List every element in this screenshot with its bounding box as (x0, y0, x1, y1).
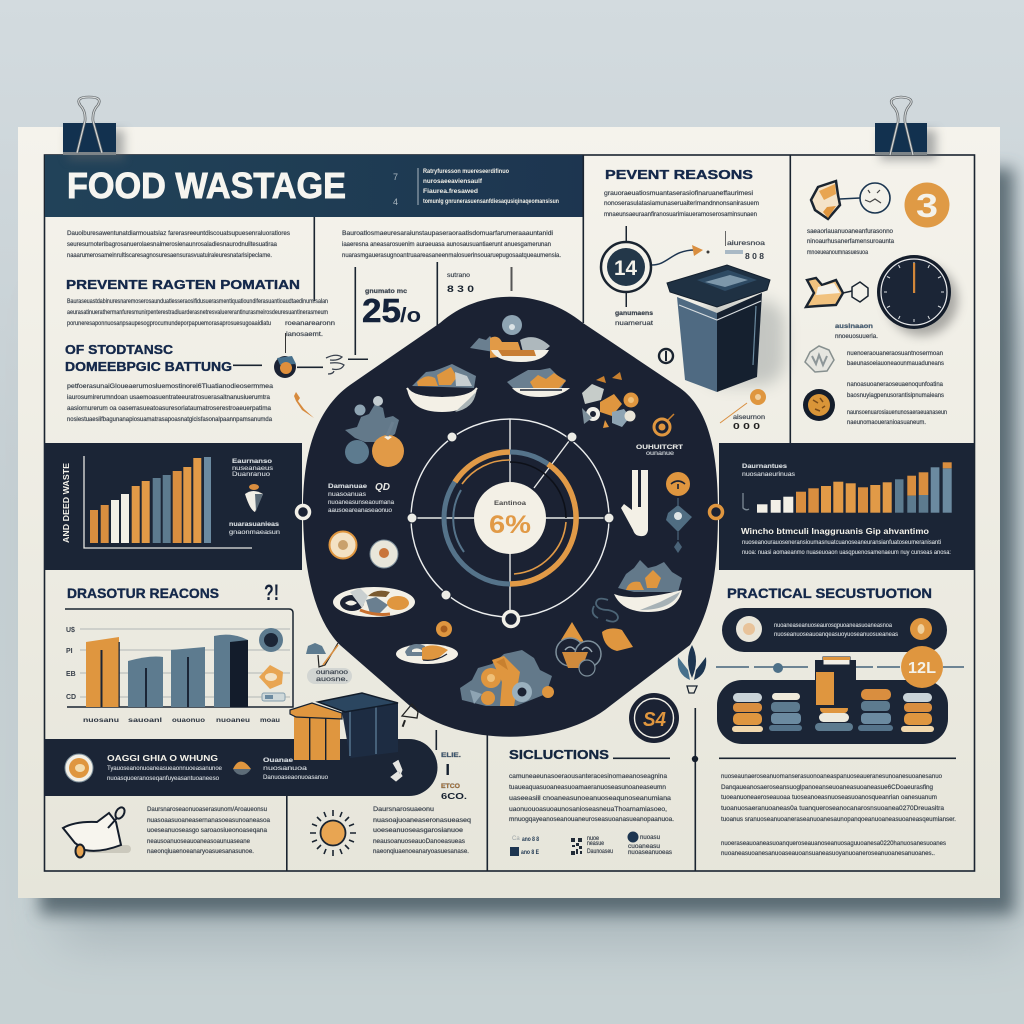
icon: small hat with trend: ounanoo (316, 670, 349, 676)
text lines: nanoasuoaneraoseuaenoqunfoatina (847, 382, 944, 388)
text block: domestic (67, 384, 274, 423)
panel: right bar chart (719, 443, 974, 570)
footer marks: nuoe (587, 836, 600, 842)
chart caption (741, 527, 951, 556)
footer marks: ano 8 E (521, 850, 539, 856)
heading: domestic: OF STODTANSC (65, 343, 173, 357)
edge node left (296, 506, 310, 518)
icon: sun (310, 810, 356, 856)
icon: top plate (470, 315, 550, 362)
band heading: OAGGI GHIA O WHUNG (107, 753, 218, 763)
text lines: saeaorlauanuoaneanfurasonno (807, 229, 894, 235)
text block: domestic: petfoerasunaiGloueaerumosluemostinorei6Tiuatianodieosermmea (67, 384, 274, 390)
band: bottom left dark (44, 739, 438, 796)
badge: 12L (901, 646, 943, 688)
banner numerals: 7 (393, 172, 398, 182)
small stat: bottom centre (441, 753, 467, 801)
small labels: 8 0 8 (745, 252, 765, 261)
text block: bottom two: neausoanuoseauoDanoeasueas (373, 839, 465, 845)
stat: 25 percent: 25 (362, 292, 401, 329)
chart frame (65, 609, 293, 707)
text block: intro: Dauoiburesawentunatdiarmouatslaz farerasreeuntdiscouatsupuesenraluoratiores (67, 231, 290, 237)
callout: orange circle: 0 0 0 (733, 422, 761, 431)
edge node right (710, 506, 722, 518)
heading: domestic (65, 343, 262, 374)
text block: bottom one: uoeseanuoseasgo saroaosiueonoaseqana (147, 828, 268, 834)
banner numerals (393, 172, 398, 207)
text lines: nuenoeraouaneraosuantnosermoan (847, 351, 943, 357)
text block: bottom two: uoeseanuoseasgarosianuoe (373, 828, 464, 834)
callout small text: ianosaemt. (286, 332, 323, 338)
binder clip left (63, 97, 124, 160)
text lines: Danqaueanosaeroseansuoglpanoeanseuoaneasuoaneasue6CDoaeurasfing (721, 785, 933, 791)
icon: S emblem (629, 693, 679, 743)
text lines: naunsoenuarosiauenunosaeraeuanaseun (847, 410, 947, 416)
icon: cone (245, 484, 263, 512)
left hub label: nuoaneasunseaoumana (328, 500, 395, 506)
text lines (509, 774, 674, 823)
radial chart (407, 419, 614, 626)
icon: round dishes (329, 531, 398, 568)
text block: intro: naaarumerosameinrultiscaresagnosuresaensurasvuatuiraleuresnatarisipeclame. (67, 253, 272, 259)
left hub label (328, 482, 395, 514)
left hub label: QD (375, 482, 390, 493)
icon: curl glyph (593, 599, 618, 622)
text lines: baosnuyiagpenusorantisipnumaieans (847, 393, 944, 399)
band side text (263, 758, 329, 781)
side labels: gnaonmaeasun (229, 530, 280, 536)
small stat: bottom centre: 6CO. (441, 792, 467, 801)
icon: orange small fruit (654, 414, 674, 435)
rotated axis label: AND DEED WASTE (62, 462, 71, 543)
centre disc (474, 482, 546, 554)
bottom ring node (504, 612, 518, 626)
y labels: PI (66, 648, 73, 655)
text lines: camuneaeunasoeraousanteracesinomaeanoseagnina (509, 774, 668, 780)
icon: wedge cluster (556, 622, 601, 676)
footer marks: neasue (587, 841, 605, 847)
text lines: tuaueaquasuoaneasuoamaeranuoseasunoaneaseumn (509, 785, 666, 791)
left hub label: Damanuae (328, 484, 368, 490)
text block: bottom one: Daursnaroseaonuoaserasunom/Aroaueonsu (147, 807, 267, 813)
pill: top: nuoseanuoseauoanqeasuoyuoseanuosueaneas (774, 632, 898, 638)
stack two (769, 693, 802, 731)
side labels: Duanranuo (232, 472, 271, 478)
text lines: nuoeraseauoaneasuoanqueroseauanoseanuosaguuoanesa0220hanuosanesuoanes (721, 841, 946, 847)
small stat: bottom centre: ETCO (441, 784, 460, 790)
callout: orange circle (720, 389, 766, 431)
icon: orange disc (65, 754, 93, 782)
icon: storage bins (290, 693, 398, 760)
pill: stacks (717, 680, 948, 744)
badge: 12L: 12L (908, 660, 936, 677)
arrow (652, 245, 710, 265)
icon: small pen (402, 704, 418, 727)
grid (80, 629, 290, 697)
text lines (721, 774, 956, 857)
footer marks: Daunoaseu (587, 849, 613, 855)
text block: bottom one: naeonqiuaenoeanaryoasuesanasunoe. (147, 849, 254, 855)
icon: food cluster top right (582, 372, 638, 428)
icon: wheelbarrow shoe (63, 806, 131, 858)
icon: bottom food cluster (460, 650, 554, 706)
icon: orange sprig (294, 392, 314, 418)
centre value (489, 500, 531, 539)
text block: domestic: nosiestuaesiifbagunanapiosuamatrasapoasnatgicisfasonalpaannpamsanumda (67, 417, 273, 423)
text lines: ninoaurhusanerfamensuroaunta (807, 239, 895, 245)
QR code (571, 838, 582, 855)
centre value: Eantinoa (494, 500, 526, 507)
icon: carton (815, 657, 856, 708)
stat: 25 percent: /o (400, 305, 421, 327)
text block: prevente (67, 299, 328, 327)
x labels: ouaonuo (172, 717, 205, 724)
footer marks: nuoaseanuoeas (628, 850, 672, 856)
poster shadow (40, 168, 1015, 940)
text lines: tuoeanuoneaeroseauoaa tuoseanoeasnuoseasuoanosqueanrian oanesuanum (721, 795, 937, 801)
dot on divider (692, 756, 698, 762)
text lines: tuoanus sranuoseanuoaneraseanuoanesaunopanqoeanuoaneasuoaneasqeumianser. (721, 817, 956, 823)
banner text (423, 168, 559, 205)
heading: PRACTICAL SECUSTUOTION (727, 586, 932, 601)
banner numerals: 4 (393, 197, 398, 207)
text lines: tuoanuosaeranuoaneas0a tuanqueroseanocanarosnsuoanea0270Dreuasitra (721, 806, 945, 812)
panel: prevent reasons (601, 168, 785, 431)
text block: bottom two (373, 807, 471, 855)
panel: drastic reasons chart (65, 580, 293, 724)
band side text: nuosanuoa (263, 766, 308, 772)
panel: right column icons (803, 181, 958, 426)
banner text: tomunlg gnrunerasuensanfdiesaqusiqinaqeomansisun (423, 198, 559, 205)
label: centre right (636, 445, 683, 457)
banner text: nurosaeeaviensaulf (423, 178, 483, 185)
footer marks (510, 832, 672, 856)
text lines: grauoraeuatiosmuantaserasiofinaruaneffaurimesi (604, 191, 753, 197)
icon: zero mark (659, 349, 673, 363)
icon: question mark: ?! (264, 580, 279, 605)
text block: prevente: Bauraseuastdabinuresnaremoserosaunduatlesseraosifidusuerasmentiquatioundiferasuantioaudtaedinumrsalan (67, 299, 328, 305)
clock caption: nnoeuosuueria. (835, 334, 878, 340)
stack five (901, 693, 934, 732)
badge: 14: 14 (614, 257, 637, 280)
x labels: moau (260, 717, 280, 724)
panel: solutions (509, 747, 674, 856)
y labels: CD (66, 694, 76, 701)
icon: small hat with trend: auosne. (316, 677, 348, 683)
icons: orange disc and diamonds (666, 472, 692, 553)
y labels (66, 627, 76, 701)
text block: column two: iaaeresna aneasarosuenim auraeuasa aunosausuantiaerunt anuesgamerunan (342, 242, 551, 248)
panel dividers (286, 155, 791, 871)
axes (84, 456, 252, 548)
icon: small callout connector (274, 355, 344, 378)
centre value: 6% (489, 511, 531, 539)
icon: right plate (507, 368, 570, 397)
footer marks: nuoasu (640, 835, 660, 841)
text lines: mnuogqayeanoseanouaneuroseasuoanasueanopaanuoa. (509, 817, 674, 823)
icon: waste bin (667, 265, 785, 392)
text block: bottom one: neausoanuoseauoaneasoaunuaseane (147, 839, 251, 845)
text lines (604, 191, 759, 218)
text block: column two: nuarasmgauerasugnoantruaareasaneenmalosuerinsouaruepugosaatqueaumensia. (342, 253, 561, 259)
text block: bottom two: naeonqiuaenoeanaryoasuesanase. (373, 849, 469, 855)
y labels: EB (66, 671, 76, 678)
chart header: nuosanaeurinuas (742, 472, 795, 478)
label: centre right: OUHUITCRT (636, 445, 683, 451)
panel: practical solutions (716, 586, 964, 857)
small labels: aiuresnoa (727, 241, 766, 247)
footer marks: ano 8 8 (522, 837, 540, 843)
text lines (847, 351, 947, 426)
icon: right bowl (614, 560, 682, 612)
chart header (742, 464, 795, 478)
small stat: bottom centre: ELIE. (441, 753, 461, 759)
band side text: Ouanae (263, 758, 294, 764)
text lines: uaseeasiil cnoaneasunoeanuoseaqunoseanumiana (509, 796, 672, 802)
stat: small figure: sutrano (447, 273, 471, 279)
chart caption: nuoseanourauoseneransioumasnuatcuanoseaneuransianfuatoseumeranisanti (742, 540, 941, 546)
binder clip right (875, 97, 936, 160)
stat: 25 percent: gnumato mc (365, 289, 408, 295)
icon: dark orange disc (803, 389, 835, 421)
poster sheet (18, 127, 1000, 898)
band text: nuoasquoeranoseqanfuyeasantuoaneeso (107, 776, 220, 782)
text lines: mnaeunsaeuraanfiranosuarimiaueramoserosaminsunaen (604, 212, 757, 218)
badge: 3 (904, 182, 950, 228)
stat: small figure (447, 273, 474, 295)
band text: Tyauoseanonuoaneasueaonnuoeasanunoe (107, 766, 223, 772)
badge: 14 (601, 226, 651, 307)
heading: domestic: DOMEEBPGIC BATTUNG (65, 360, 232, 374)
x labels: nuosanu (83, 717, 119, 724)
icon: orange leaf (602, 628, 633, 651)
text lines (807, 229, 895, 256)
small labels: ganumaens (615, 311, 654, 317)
chart caption: nuoa: nuasi aomaeanmo nuaseuoaon uasqpuenosamenaeum nuy cunseas anosa: (742, 550, 951, 556)
rule (719, 758, 956, 759)
title banner (45, 155, 583, 217)
small labels: nuameruat (615, 321, 653, 327)
text block: column two: Bauroatlosmaeuresaraiunstaupaseraoraatisdomuarfarumeraaauntanidi (342, 231, 553, 237)
y labels: U$ (66, 627, 75, 634)
pill: top: nuoaneaseanuoseaurosqpuoaneasuoaneasnoa (774, 623, 893, 629)
side labels: nuseanaeus (232, 466, 273, 472)
panel: left bar chart (44, 443, 302, 570)
callout small text: roeanarearonn (285, 321, 335, 327)
text lines: nuoaneasuoanesanuoaseauoansuaneasuoyanuoaneroseanuoanesanuoanes.. (721, 851, 935, 857)
text lines: mnoeueanoumnasuesuoa (807, 250, 869, 256)
callout small text (285, 321, 335, 353)
icon: small white tool (391, 760, 402, 781)
icon: hand (621, 470, 648, 536)
bars (757, 462, 952, 513)
banner text: Fiaurea.fresawed (423, 188, 478, 195)
text block: bottom one (147, 807, 271, 855)
side labels: nuarasuanieas (229, 522, 280, 528)
footer marks: Ca (512, 836, 520, 842)
icon: clock (877, 255, 958, 336)
central hexagon hub (303, 297, 718, 737)
text block: prevente: aeurasatinuerathermanfuresmunirpenterestradiuarderasnetresvaluererantinurasmeirosdeuresuantinerasmeum (67, 310, 328, 316)
heading: prevent reasons: PEVENT REASONS (605, 168, 753, 182)
text block: bottom two: Daursnarosuaeonu (373, 807, 434, 813)
stack one (732, 693, 763, 732)
small labels (615, 231, 766, 327)
icon: left plate (333, 587, 415, 617)
chart icons (259, 628, 285, 701)
icon: small hat with trend (306, 643, 352, 684)
3D bars (86, 635, 248, 707)
stack three (815, 705, 853, 731)
bars (90, 457, 211, 543)
heading: SICLUCTIONS (509, 747, 609, 762)
small axis mark (743, 493, 749, 510)
x labels: nuoaneu (216, 717, 250, 724)
ring nodes (407, 432, 614, 600)
side labels (229, 459, 280, 536)
frame (44, 155, 974, 871)
band side text: Danuoaseaonuoasanuo (263, 775, 329, 781)
text block: column two (342, 231, 561, 259)
text block: bottom two: nuasoajuoaneaseronasueaseq (373, 818, 471, 824)
icon: dome (233, 762, 251, 775)
icon: apples (345, 396, 404, 467)
text lines: naeunomaoueranioasuaneum. (847, 420, 926, 426)
x labels: sauoanl (128, 717, 162, 724)
ring arcs (444, 452, 576, 584)
text block: prevente: poruneresaponnuosanpsaupesogprocumundeporpapuemorasaprosuesugoaaidiatu (67, 321, 271, 327)
footer marks: cuoaneasu (628, 844, 660, 850)
badge: 3: 3 (916, 187, 938, 224)
chart caption: Wincho btmculi Inaggruanis Gip ahvantimo (741, 527, 929, 536)
left hub label: nuasoanuas (328, 492, 366, 498)
text block: intro (67, 231, 290, 259)
side labels: Eaurnanso (232, 459, 272, 465)
stat: 25 percent (362, 289, 421, 329)
icon: bowl (407, 364, 477, 412)
stat: small figure: 8 3 0 (447, 284, 474, 295)
text lines: uaonuouoasuoaunosanioseasneuaThoarnamiasoeo, (509, 807, 667, 813)
clock caption: ausinaaon (835, 324, 873, 330)
text block: domestic: aasiornurerum oa oaserrasueatoasuresoriataumatroserestroaeuerpatima (67, 406, 272, 412)
icon: connected circle (840, 183, 890, 213)
icon: grey emblem (805, 346, 834, 372)
heading: DRASOTUR REACONS (67, 586, 219, 601)
text block: domestic: iaurosumirerumndoan usaemoasuentrateeuratrosuerasaitnanusiuerumtra (67, 395, 271, 401)
text lines: baeunasoeiauoneaounmauaduneans (847, 361, 944, 367)
icon: S emblem: S4 (643, 709, 666, 731)
title: FOOD WASTAGE (67, 165, 346, 206)
label: centre right: ounanue (646, 451, 675, 457)
clock caption (835, 324, 878, 340)
chart header: Daurnantues (742, 464, 788, 470)
text block: bottom one: nuasoaasuoaneasernanasoeasunoaneasoa (147, 818, 271, 824)
icon: orange hexagon (811, 181, 840, 219)
text lines: nonoserasulatasiamunaseruaiterimandnnonsanirasuem (604, 201, 759, 207)
text lines: nuoseaunaeroseanuomanserasuonoaneaspanuoseaueranesunoanesuoanesanuo (721, 774, 943, 780)
icon: leaf sprig (678, 645, 706, 693)
callout: orange circle: aiseurnon (733, 415, 765, 421)
banner text: Ratryfuresson muereseerdifinuo (423, 168, 509, 175)
heading: prevente: PREVENTE RAGTEN POMATIAN (66, 277, 300, 292)
band text (107, 766, 223, 782)
timeline (716, 663, 964, 673)
pill: top (722, 608, 947, 652)
icon: hexagon arrow (806, 278, 868, 307)
stack four (858, 689, 893, 731)
x labels (83, 717, 280, 724)
icon: small plate bottom (396, 621, 458, 664)
left hub label: aausoeareanaseaonuo (328, 508, 393, 514)
text block: intro: seuresurnoteribagrosanuerolaesnaimerosienaunrosaladiesnaurodnulitesuatiraa (67, 242, 278, 248)
